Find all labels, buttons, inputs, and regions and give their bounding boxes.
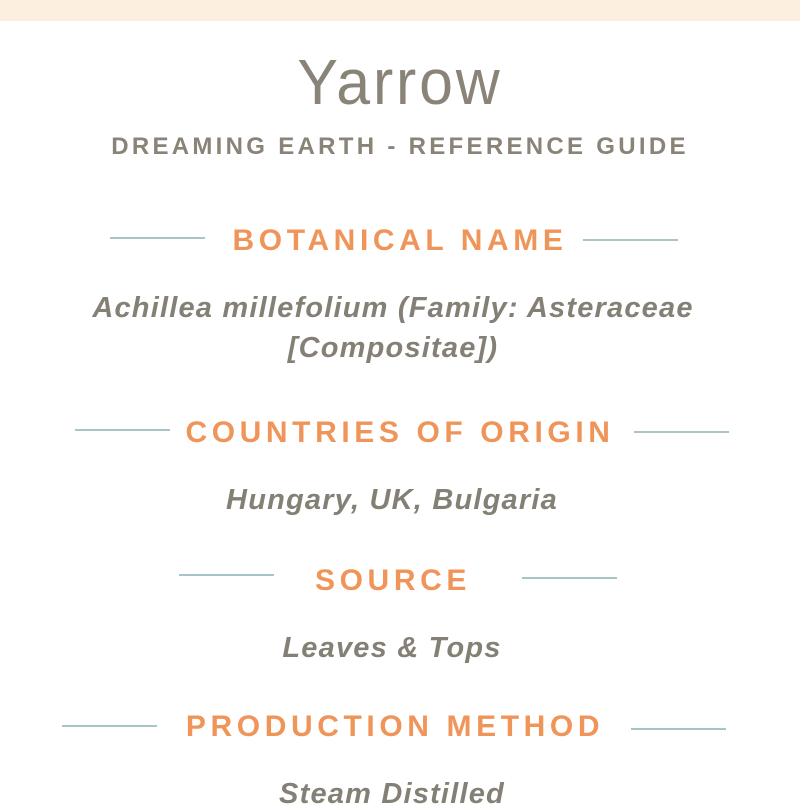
- text: source: Leaves & Tops: [282, 632, 502, 664]
- text: countries: Hungary, UK, Bulgaria: [226, 484, 558, 516]
- section: source: [179, 564, 617, 664]
- top band: [0, 0, 800, 21]
- text: botanical name: Achillea millefolium (Family: Asteraceae: [92, 292, 694, 324]
- section: botanical name: [92, 224, 694, 364]
- section: production method: [62, 710, 726, 810]
- heading: botanical name: BOTANICAL NAME: [233, 224, 567, 257]
- heading: countries: COUNTRIES OF ORIGIN: [185, 416, 615, 449]
- title: Yarrow: [297, 46, 503, 118]
- text: botanical name: [92, 292, 694, 364]
- text: production: Steam Distilled: [279, 778, 505, 810]
- section: countries of origin: [75, 416, 729, 516]
- heading: production: PRODUCTION METHOD: [186, 710, 604, 743]
- heading: source: SOURCE: [315, 564, 471, 597]
- subtitle: DREAMING EARTH - REFERENCE GUIDE: [111, 133, 689, 160]
- text: botanical name: [Compositae]): [288, 332, 498, 364]
